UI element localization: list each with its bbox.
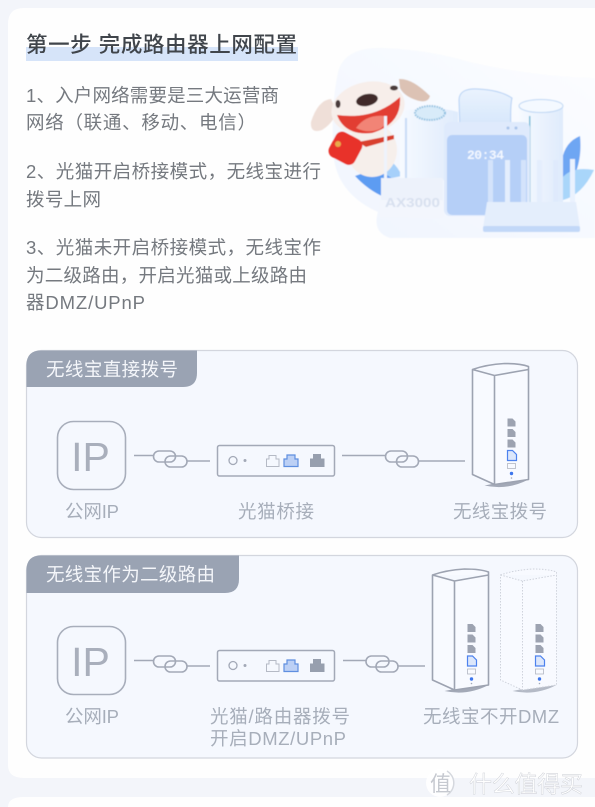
text block: requirements: 网络（联通、移动、电信） <box>26 112 256 133</box>
panel: direct dial <box>26 350 578 538</box>
smart screen <box>444 122 530 216</box>
red packet <box>326 129 365 167</box>
left leaves <box>355 171 392 197</box>
label: bridge modem: 光猫桥接 <box>238 501 314 522</box>
left AX3000 router <box>381 178 443 202</box>
label: router dial: 无线宝拨号 <box>453 501 547 522</box>
text block: requirements: 为二级路由，开启光猫或上级路由 <box>26 265 307 286</box>
mascot head <box>326 75 410 141</box>
label: public IP: 公网IP <box>65 706 119 727</box>
tower router left <box>400 108 458 180</box>
icon: link 2 <box>343 656 425 672</box>
label: modem or router dial <box>210 706 350 749</box>
text block: requirements: 2、光猫开启桥接模式，无线宝进行 <box>26 161 321 182</box>
illustration: mascot and routers: AX3000 <box>385 196 440 210</box>
label: modem or router dial: 开启DMZ/UPnP <box>210 728 346 749</box>
icon: public IP <box>58 626 126 694</box>
label: router no DMZ: 无线宝不开DMZ <box>423 706 559 727</box>
centre antenna <box>384 116 387 180</box>
icon: modem or router <box>218 650 334 681</box>
icon: dotted wireless router <box>500 569 556 693</box>
mascot body <box>347 123 397 177</box>
mascot ears <box>311 99 337 131</box>
icon: public IP: IP <box>71 639 110 685</box>
text block: requirements: 拨号上网 <box>26 189 101 210</box>
illustration: mascot and routers <box>311 48 595 238</box>
tab: secondary router: 无线宝作为二级路由 <box>46 564 215 585</box>
mascot mouth <box>337 97 400 133</box>
tab: direct dial <box>26 350 197 387</box>
watermark: 值 <box>430 773 451 796</box>
icon: public IP: IP <box>71 434 110 480</box>
label: modem or router dial: 光猫/路由器拨号 <box>210 706 350 727</box>
icon: wireless router <box>472 364 528 487</box>
icon: public IP <box>58 422 126 490</box>
text block: requirements <box>26 85 321 313</box>
icon: link 1 <box>134 451 210 467</box>
right leaves <box>562 136 580 178</box>
blob background <box>333 48 595 238</box>
right router antennas <box>488 160 493 204</box>
icon: bridge modem <box>218 446 334 476</box>
right flat router <box>483 202 580 228</box>
watermark: 什么值得买 <box>469 771 583 797</box>
lower card edge <box>8 797 595 807</box>
icon: link 1 <box>134 656 210 672</box>
icon: wireless router <box>432 569 488 693</box>
label: public IP: 公网IP <box>65 501 119 522</box>
tab: secondary router <box>26 556 239 593</box>
mascot collar <box>358 135 394 147</box>
mascot eyes and nose <box>336 100 340 108</box>
text block: requirements: 器DMZ/UPnP <box>26 292 145 313</box>
text block: requirements: 3、光猫未开启桥接模式，无线宝作 <box>26 237 321 258</box>
dome router <box>459 89 512 130</box>
tab: direct dial: 无线宝直接拨号 <box>46 359 178 380</box>
clock text: 20:34 <box>467 148 504 163</box>
watermark <box>426 769 583 797</box>
cylinder router <box>519 105 563 205</box>
text block: requirements: 1、入户网络需要是三大运营商 <box>26 85 279 106</box>
panel: secondary router <box>26 556 578 758</box>
icon: link 2 <box>342 451 465 467</box>
title: 第一步 完成路由器上网配置 <box>26 33 297 57</box>
